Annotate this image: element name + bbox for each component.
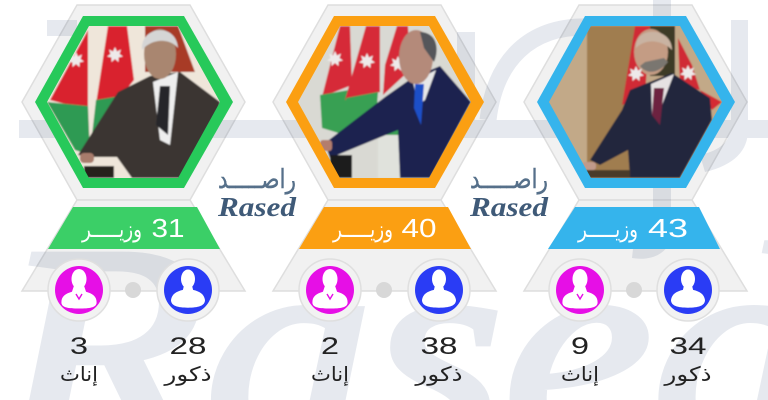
- logo: Rased left: راصـــــد: [218, 164, 296, 194]
- count: 40 ministers: 40: [402, 213, 436, 243]
- stat: female count: 9: [571, 333, 589, 360]
- orange hexagon frame: [286, 16, 484, 188]
- icon: male: [408, 259, 470, 321]
- icon: female: [549, 259, 611, 321]
- stat: female count: إناث: [311, 364, 349, 387]
- icon: female: [299, 259, 361, 321]
- stat: male count: [414, 333, 462, 386]
- icon: male: [157, 259, 219, 321]
- count: 43 ministers: وزيـــــر: [577, 216, 638, 243]
- stat: male count: ذكور: [663, 364, 712, 386]
- logo: Rased right: Rased: [469, 192, 549, 222]
- photo: minister with Jordan flags: [298, 26, 471, 178]
- orange count band: [299, 207, 471, 249]
- count: 31 ministers: [81, 213, 184, 243]
- count: 43 ministers: [577, 213, 688, 243]
- connector dot: [626, 282, 642, 298]
- connector dot: [125, 282, 141, 298]
- stat: female count: 2: [321, 333, 339, 360]
- green count band: [48, 207, 220, 249]
- stat: female count: [561, 333, 599, 387]
- stat: male count: 28: [170, 333, 206, 360]
- pale hexagon and trapezoid frames: [22, 5, 747, 291]
- logo: Rased right: [469, 164, 549, 222]
- count: 43 ministers: 43: [648, 213, 688, 243]
- stat: male count: [663, 333, 712, 386]
- count: 40 ministers: وزيـــــر: [332, 216, 393, 243]
- icon: female: [48, 259, 110, 321]
- green hexagon frame: [35, 16, 233, 188]
- count: 31 ministers: 31: [152, 213, 184, 243]
- stat: male count: ذكور: [163, 364, 212, 386]
- column: 43 ministers: [537, 16, 735, 387]
- stat: female count: 3: [70, 333, 88, 360]
- blue hexagon frame: [537, 16, 735, 188]
- stat: male count: ذكور: [414, 364, 462, 386]
- stat: female count: إناث: [60, 364, 98, 387]
- stat: male count: 38: [420, 333, 458, 360]
- column: 40 ministers: [286, 16, 484, 387]
- connector dot: [376, 282, 392, 298]
- count: 31 ministers: وزيـــــر: [81, 216, 142, 243]
- logo: Rased right: راصـــــد: [470, 164, 548, 194]
- count: 40 ministers: [332, 213, 436, 243]
- stat: female count: إناث: [561, 364, 599, 387]
- stat: male count: 34: [670, 333, 706, 360]
- photo: minister with Jordan flags: [47, 26, 220, 178]
- stat: female count: [311, 333, 349, 387]
- stat: female count: [60, 333, 98, 387]
- logo: Rased left: Rased: [217, 192, 297, 222]
- photo: minister with Jordan flags: [549, 26, 722, 178]
- icon: male: [657, 259, 719, 321]
- logo: Rased left: [217, 164, 297, 222]
- column: 31 ministers: [35, 16, 233, 387]
- blue count band: [548, 207, 720, 249]
- stat: male count: [163, 333, 212, 386]
